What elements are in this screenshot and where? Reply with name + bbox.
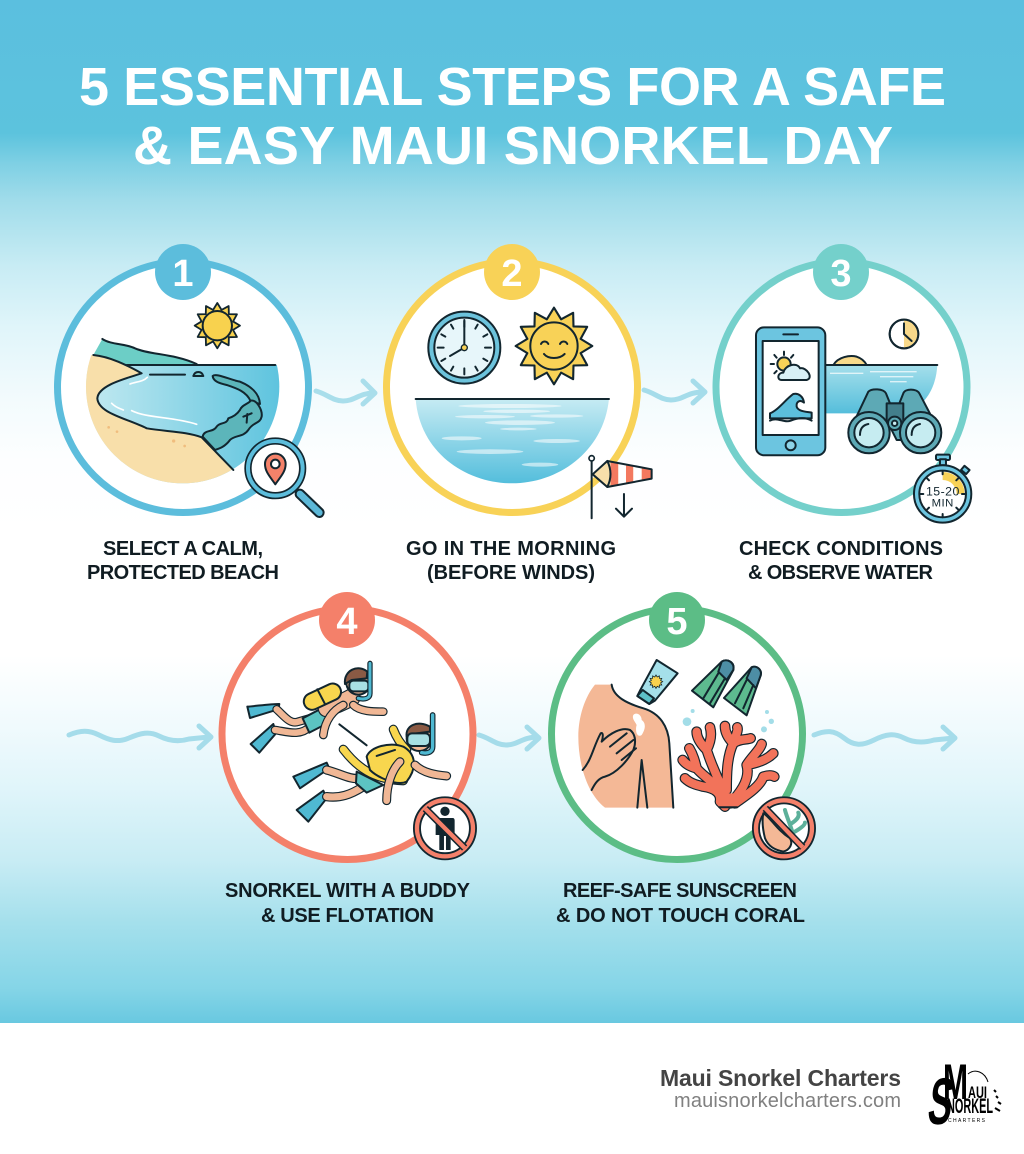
logo: CHARTERS [948,1118,986,1124]
snorkeler one [247,663,383,753]
swim fins [692,660,761,715]
stopwatch 15-20 min [914,455,971,523]
arrow: lead into step 4 [69,726,211,748]
step 5 caption [556,880,805,927]
logo [924,1054,1001,1139]
shoulder with sunscreen [578,685,673,808]
step 2 illustration [416,308,652,518]
small clock icon [890,320,918,348]
arrow: step 1 to step 2 [316,381,375,404]
step 3 caption: CHECK CONDITIONS [739,538,943,560]
step 3 caption: & OBSERVE WATER [748,562,934,584]
panel: step 2 [386,244,652,584]
step 1 ring [58,262,308,512]
snorkeler two with flotation [293,715,447,822]
step 3 ring [716,262,967,512]
smiling sun icon [516,308,592,384]
step 5 number badge: 5 [666,601,688,643]
clock icon [428,312,500,384]
step 4 caption: SNORKEL WITH A BUDDY [225,880,471,902]
footer brand text: Maui Snorkel Charters [660,1065,901,1091]
step 5 illustration [578,660,812,856]
step 4 ring [222,608,473,860]
title: 5 ESSENTIAL STEPS FOR A SAFE [79,57,946,117]
step 3 number badge [813,244,869,300]
icon: no solo swimming sign [417,800,473,856]
sun icon [195,303,240,348]
buddy link line [339,724,367,745]
step 2 caption: (BEFORE WINDS) [427,562,595,584]
panel: step 4 [222,592,473,927]
magnifier with location pin [248,441,319,513]
logo: AUI [968,1083,987,1102]
arrow: after step 5 [814,727,955,749]
footer brand text [660,1065,901,1112]
bubbles [683,709,774,732]
logo: S [924,1065,958,1139]
step 2 ring [386,262,638,512]
windsock icon [589,456,652,518]
logo: M [943,1054,968,1110]
stopwatch 15-20 min: MIN [932,498,953,510]
step 2 caption: GO IN THE MORNING [406,538,616,560]
ocean view with island [823,356,937,413]
phone with weather app [756,327,825,455]
step 1 number badge: 1 [172,253,194,295]
icon: do not touch coral sign [756,800,812,856]
beach scene [86,338,280,484]
calm water [416,399,609,483]
title: & EASY MAUI SNORKEL DAY [133,116,893,176]
step 3 caption [739,538,943,584]
step 1 caption: SELECT A CALM, [103,538,263,560]
footer brand text: mauisnorkelcharters.com [674,1090,901,1112]
panel: step 3 [716,244,971,584]
stopwatch 15-20 min: 15-20 [926,484,959,498]
step 1 illustration [73,303,319,513]
step 2 number badge [484,244,540,300]
arrow: step 4 to step 5 [479,727,539,749]
coral icon [683,726,774,807]
step 4 number badge [319,592,375,648]
step 2 number badge: 2 [501,253,523,295]
step 4 caption: & USE FLOTATION [261,905,434,927]
step 1 number badge [155,244,211,300]
step 5 number badge [649,592,705,648]
step 5 ring [552,608,802,860]
step 1 caption: PROTECTED BEACH [87,562,279,584]
panel: step 5 [552,592,812,927]
arrow: step 2 to step 3 [644,381,705,403]
step 3 illustration [756,320,971,523]
step 4 number badge: 4 [336,601,358,643]
title [79,57,946,176]
binoculars icon [848,389,941,453]
step 5 caption: & DO NOT TOUCH CORAL [556,905,805,927]
step 2 caption [406,538,616,584]
step 3 number badge: 3 [830,253,852,295]
footer band [0,1023,1024,1154]
step 4 illustration [247,663,473,856]
step 4 caption [225,880,471,927]
step 5 caption: REEF-SAFE SUNSCREEN [563,880,797,902]
step 1 caption [87,538,279,584]
panel: step 1 [58,244,319,584]
sunscreen tube [637,660,678,704]
